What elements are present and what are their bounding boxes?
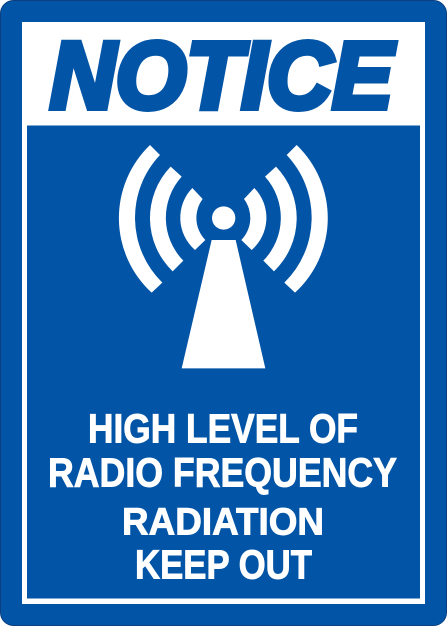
title: NOTICE [50,23,396,129]
icon: antenna tip [212,206,235,230]
blue panel [27,126,420,598]
warning message [48,406,397,588]
text line 4: KEEP OUT [135,542,312,588]
icon: antenna tower [182,240,265,368]
text line 3: RADIATION [122,502,324,544]
text line 1: HIGH LEVEL OF [88,406,358,452]
icon: right radio waves [241,145,328,293]
text line 2: RADIO FREQUENCY [48,450,397,496]
icon: radio antenna [119,145,328,368]
icon: left radio waves [119,145,205,293]
